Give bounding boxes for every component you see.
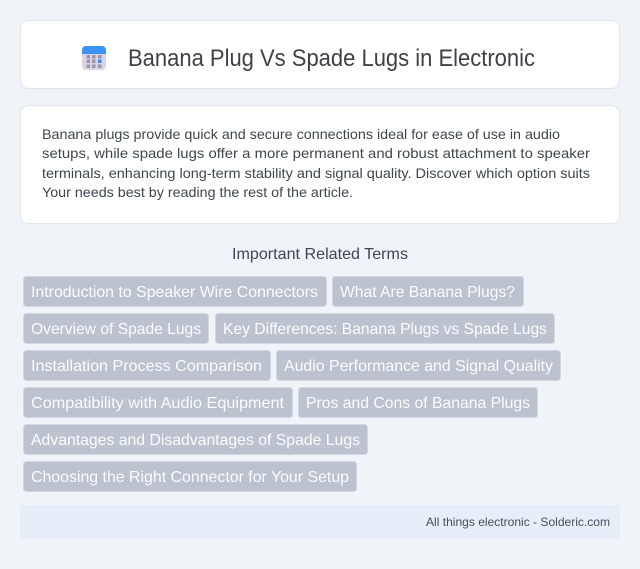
panel: description	[20, 106, 620, 224]
description text: terminals, enhancing long-term stability and signal quality. Discover which option suits	[42, 165, 590, 181]
heading: important related terms: Important Related Terms	[232, 246, 408, 263]
tag: audio performance	[276, 350, 560, 380]
tag: compatibility	[24, 388, 292, 418]
tag: installation	[24, 350, 270, 380]
tag: advantages	[24, 424, 368, 454]
tag: key differences: Key Differences: Banana Plugs vs Spade Lugs	[223, 321, 547, 338]
tag list	[24, 276, 560, 492]
icon: calendar	[82, 46, 106, 70]
tag: introduction	[24, 276, 326, 306]
description text: setups, while spade lugs offer a more permanent and robust attachment to speaker	[42, 145, 590, 161]
tag: compatibility: Compatibility with Audio Equipment	[31, 395, 285, 412]
description text: Banana plugs provide quick and secure connections ideal for ease of use in audio	[42, 126, 560, 142]
tag: pros and cons: Pros and Cons of Banana Plugs	[306, 395, 530, 412]
footer	[20, 505, 620, 539]
footer text: All things electronic - Solderic.com	[426, 515, 610, 529]
tag: what are banana plugs: What Are Banana Plugs?	[340, 284, 515, 301]
description text: Your needs best by reading the rest of the article.	[42, 184, 353, 200]
tag: choosing: Choosing the Right Connector for Your Setup	[31, 469, 349, 486]
tag: choosing	[24, 462, 356, 492]
tag: installation: Installation Process Comparison	[31, 358, 262, 375]
tag: advantages: Advantages and Disadvantages of Spade Lugs	[31, 432, 360, 449]
tag: what are banana plugs	[332, 276, 524, 306]
tag: pros and cons	[298, 388, 538, 418]
title: Banana Plug Vs Spade Lugs in Electronic	[128, 45, 535, 72]
tag: introduction: Introduction to Speaker Wire Connectors	[31, 284, 318, 301]
tag: audio performance: Audio Performance and Signal Quality	[284, 358, 553, 375]
panel: title header	[20, 20, 620, 88]
tag: overview of spade lugs	[24, 314, 208, 344]
tag: overview of spade lugs: Overview of Spade Lugs	[31, 321, 201, 338]
description text	[42, 126, 590, 200]
tag: key differences	[216, 314, 554, 344]
